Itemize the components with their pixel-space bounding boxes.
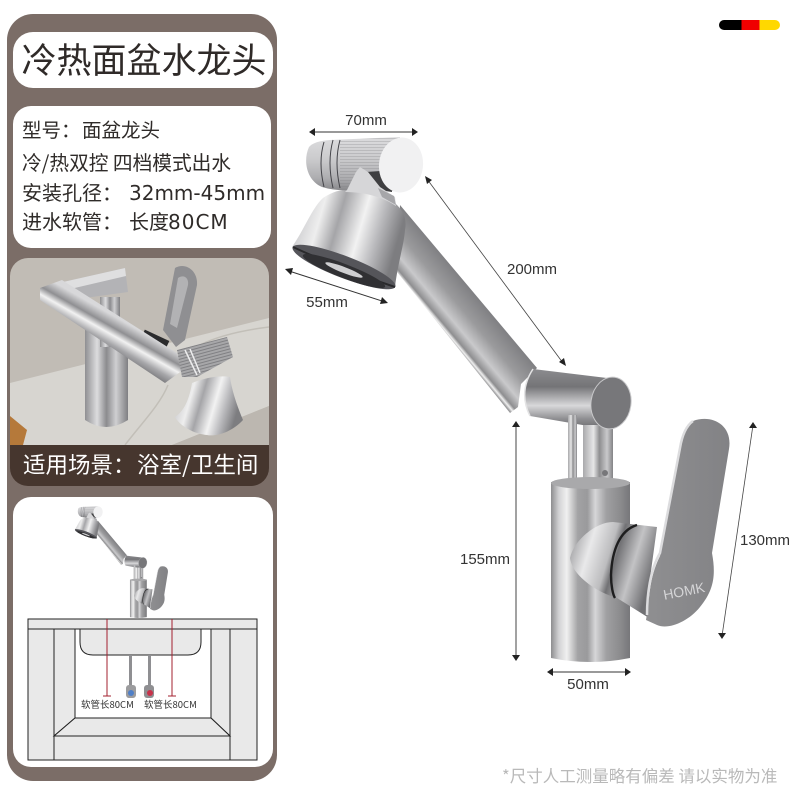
spec: hole size: 32mm-45mm: [129, 181, 265, 205]
spec: modes: 冷/热双控 四档模式出水: [22, 147, 231, 176]
hose label right: 软管长80CM: [144, 697, 197, 711]
dimension 55mm: [285, 268, 388, 311]
panel: usage scene photo: [10, 258, 269, 486]
spec: model: 型号：: [22, 114, 81, 143]
hose label left: 软管长80CM: [81, 697, 134, 711]
cabinet diagram: [28, 619, 257, 760]
brand on handle: HOMK: [662, 579, 707, 603]
dimension 70mm: [309, 112, 418, 136]
dimension 55mm: 55mm: [306, 294, 348, 311]
photo faucet pillar: [63, 268, 128, 427]
spec: hole size: 安装孔径：: [22, 177, 122, 206]
spec: hose: 长度: [129, 206, 169, 235]
photo faucet bell: [175, 376, 243, 435]
caption bar: [10, 445, 269, 486]
photo faucet handle: [163, 266, 197, 347]
photo wood edge: [10, 416, 27, 445]
photo wall: [10, 258, 269, 445]
dimension 70mm: 70mm: [345, 112, 387, 129]
panel: specifications: [13, 106, 271, 248]
caption bar: 浴室/卫生间: [137, 448, 258, 480]
spec: model: 面盆龙头: [82, 114, 160, 143]
hose length markers: [103, 619, 176, 696]
photo countertop: [10, 318, 269, 445]
brown background panel: [7, 14, 277, 781]
footnote: *尺寸人工测量略有偏差 请以实物为准: [502, 763, 777, 787]
dimension 130mm: 130mm: [740, 532, 790, 549]
photo faucet knurled head: [177, 337, 233, 377]
dimension 200mm: 200mm: [507, 261, 557, 278]
small faucet: [74, 506, 168, 618]
dimension 130mm: [718, 422, 790, 639]
photo faucet arm: [40, 280, 183, 383]
dimension 155mm: [460, 421, 520, 661]
title: 冷热面盆水龙头: [21, 33, 267, 84]
panel: installation diagram: [13, 497, 273, 767]
dimension 200mm: [425, 176, 566, 366]
spec: hose: 80CM: [168, 210, 229, 234]
spec: hose: 进水软管：: [22, 206, 122, 235]
caption bar: 适用场景：: [23, 448, 136, 480]
dimension 50mm: [547, 668, 631, 693]
water hoses: [126, 655, 154, 698]
flag badge: [719, 20, 780, 30]
dimension 155mm: 155mm: [460, 551, 510, 568]
dimension 50mm: 50mm: [567, 676, 609, 693]
